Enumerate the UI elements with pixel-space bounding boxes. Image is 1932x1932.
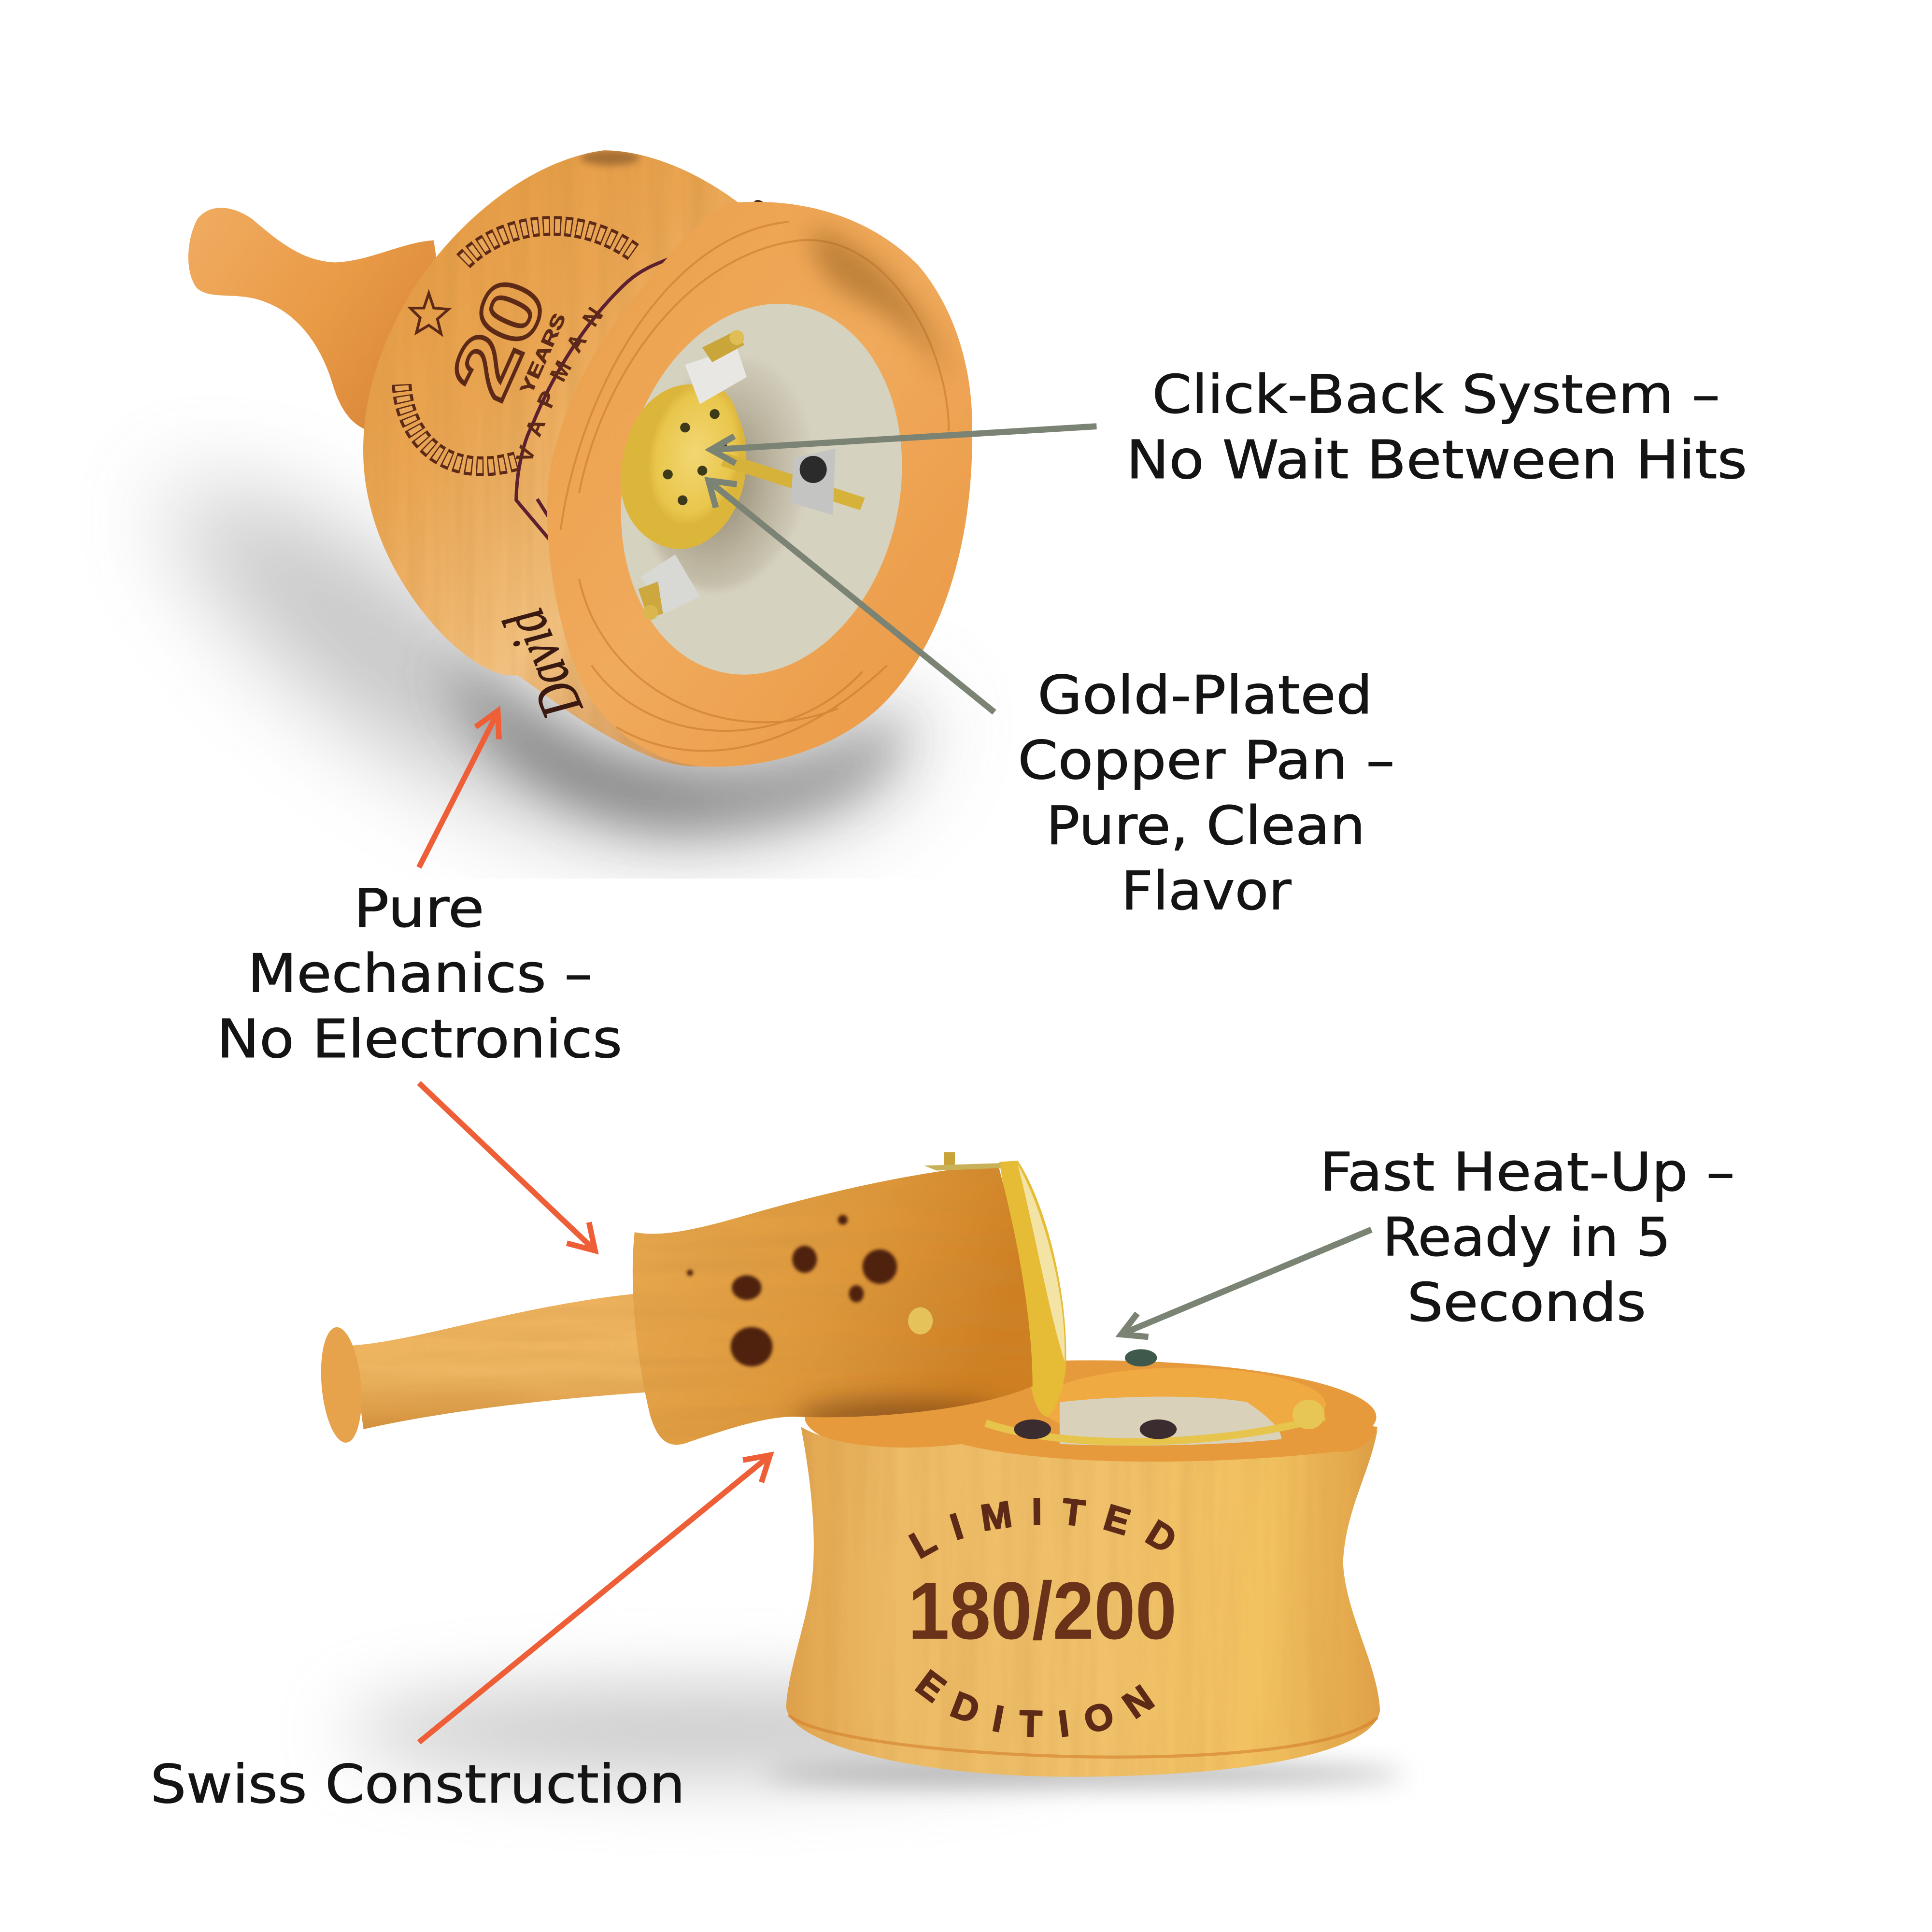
stem and flared end: [188, 208, 443, 431]
signature engraving: David: [491, 600, 595, 728]
dark wood figure on rim: [811, 228, 949, 382]
knot at top of body: [581, 150, 639, 165]
star engraving: [410, 293, 449, 334]
callout: Pure Mechanics: [217, 711, 622, 1250]
label text: [217, 877, 622, 1070]
cast shadow under top product: [160, 492, 937, 841]
small signature on rim: [724, 201, 776, 212]
label text: No Wait Between Hits: [1126, 429, 1747, 491]
limited edition engraving: LIMITED: [908, 1497, 1175, 1559]
laurel wreath engraving: [402, 226, 636, 466]
clip top: [685, 330, 747, 404]
label text: Copper Pan –: [1018, 729, 1395, 791]
bottom product photo: opened device: [317, 1152, 1405, 1787]
inner chamber: [587, 277, 936, 701]
burnt shadow on head: [795, 1400, 1004, 1434]
clip bottom: [638, 554, 700, 620]
base bottom edge: [789, 1715, 1378, 1757]
shadow close to base: [764, 1762, 1405, 1787]
arrow: [1121, 1230, 1371, 1337]
handle end disc: [317, 1325, 366, 1444]
callout: Click-Back System: [711, 364, 1747, 491]
label text: Click-Back System –: [1152, 364, 1720, 426]
arrow: [711, 426, 1096, 463]
gold spring ring: [986, 1417, 1324, 1442]
right rim fill: [1294, 1417, 1378, 1466]
label text: Gold-Plated: [1037, 664, 1373, 726]
label text: Fast Heat-Up –: [1320, 1141, 1735, 1203]
perforated plate face: [1018, 1165, 1065, 1362]
label text: Pure, Clean: [1046, 795, 1365, 856]
base inner back: [805, 1360, 1376, 1474]
knots in wood: [687, 1215, 897, 1366]
label text: Swiss Construction: [150, 1753, 685, 1815]
label text: Ready in 5: [1382, 1206, 1671, 1268]
ribbon banner engraving: [516, 239, 710, 540]
label text: [1320, 1141, 1735, 1334]
inner wall: [1040, 1368, 1326, 1442]
top product photo: mouthpiece with gold pan: [143, 150, 972, 861]
clip right: [791, 449, 836, 515]
handle: [353, 1294, 647, 1429]
arrow up: [419, 711, 499, 867]
label text: [1018, 664, 1395, 922]
label text: Mechanics –: [248, 943, 593, 1005]
gold lid plate: [999, 1161, 1066, 1417]
gold plated copper pan: [621, 374, 753, 549]
arrow: [419, 1455, 770, 1742]
label text: Flavor: [1121, 860, 1292, 922]
body grain: [412, 158, 703, 746]
wooden front rim: [547, 202, 972, 767]
label text: No Electronics: [217, 1008, 622, 1070]
callout: Swiss Construction: [150, 1455, 770, 1815]
arrow down: [419, 1083, 595, 1250]
head of mouthpiece: [633, 1165, 1033, 1445]
rim grain rings: [561, 222, 949, 751]
callout: Fast Heat-Up: [1121, 1141, 1735, 1337]
label text: Pure: [354, 877, 484, 939]
limited edition engraving: [903, 1491, 1199, 1746]
limited edition engraving: EDITION: [909, 1662, 1176, 1746]
20 years engraving: YEARS: [516, 310, 570, 398]
gold rod: [721, 454, 865, 510]
label text: [1126, 364, 1747, 491]
gold hinge pin on head: [908, 1307, 933, 1335]
edition number: 180/200: [908, 1565, 1177, 1656]
top green screw: [1125, 1349, 1157, 1366]
screws: [1014, 1420, 1177, 1439]
soft shadow under base: [345, 1689, 1060, 1773]
VAPMAN banner text: VAPMAN: [516, 306, 603, 459]
base outer wall: [786, 1427, 1380, 1777]
20 years engraving: 20: [433, 266, 564, 411]
pin on top of head: [924, 1152, 1000, 1170]
inner opening: [1060, 1397, 1281, 1446]
callout: Gold-Plated Copper Pan: [709, 481, 1395, 922]
gold pin on rim: [1293, 1400, 1324, 1429]
label text: Seconds: [1407, 1272, 1646, 1334]
arrow: [709, 481, 994, 712]
wooden body side: [363, 150, 801, 767]
